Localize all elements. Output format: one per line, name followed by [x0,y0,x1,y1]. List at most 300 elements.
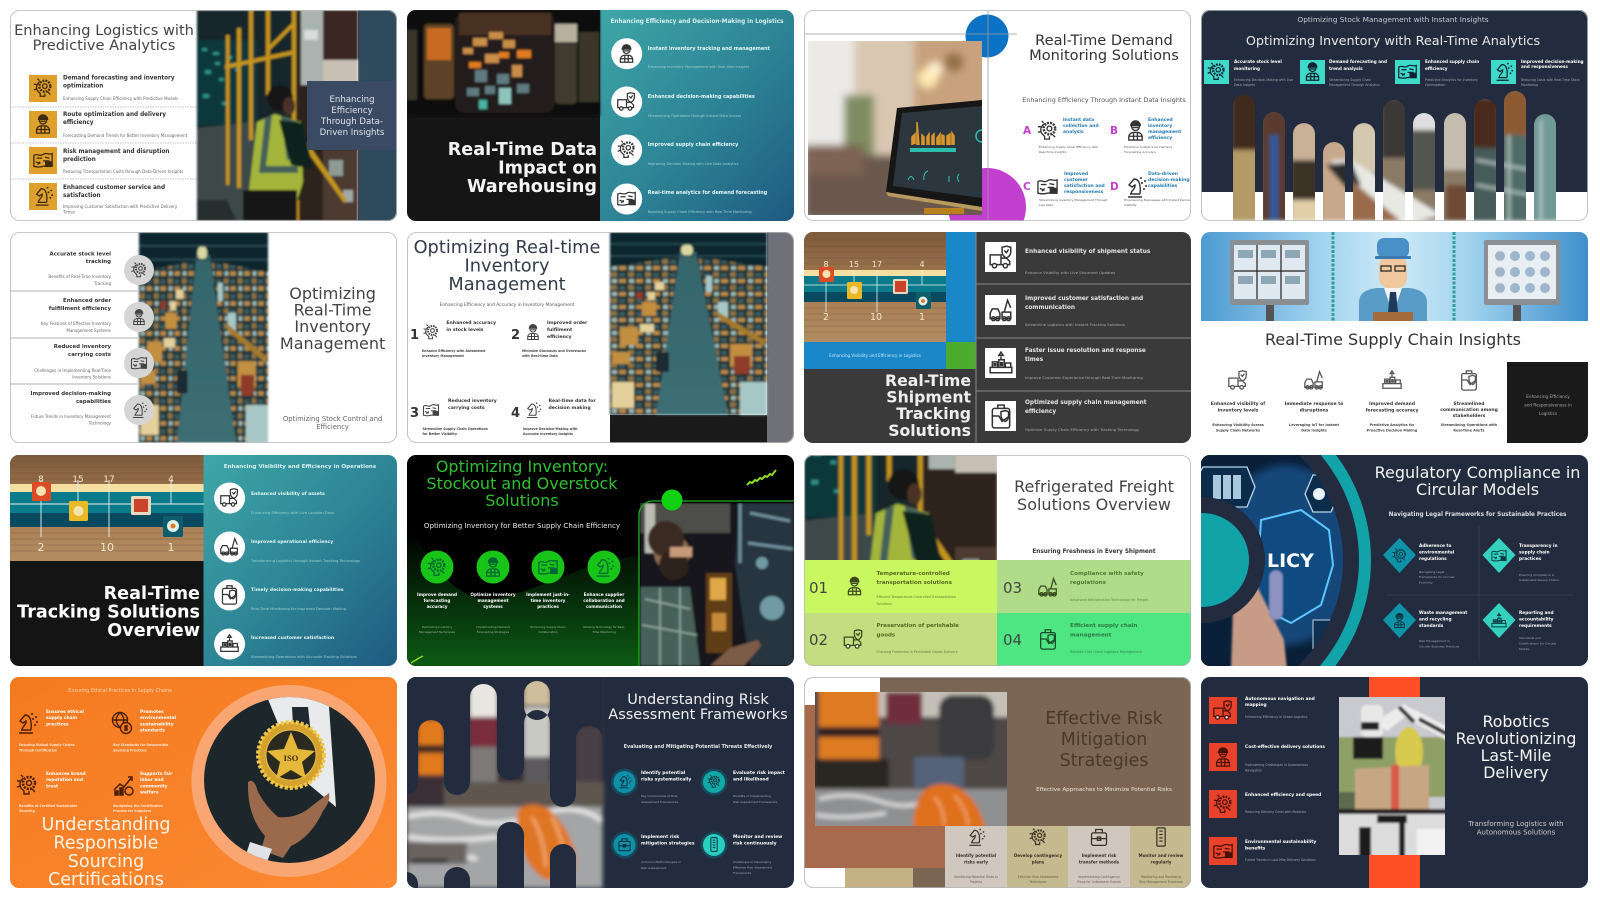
item: shipment status [985,242,1151,275]
icon: shield bag [214,580,245,610]
quadrant 02 [804,613,997,666]
item title: Instant inventory tracking and management [648,46,771,52]
dark ring [1033,397,1359,723]
letter C: C [1023,181,1031,193]
item: order fulfillment [41,298,154,333]
item text: Streamlining Supply Chain [1329,78,1371,82]
title: Impact on [498,158,597,178]
icon: globe with coin [112,712,132,734]
item text: Advanced Refrigeration Technology for Freight [1070,598,1149,602]
item: demand forecasting [29,75,178,102]
subtitle: Optimizing Stock Management with Instant Insights [1297,15,1489,24]
item text: Implementing Demand [476,625,510,629]
icon: worker [476,550,510,584]
item 3 [410,398,497,436]
quadrant 04 [997,613,1191,666]
item text: Monitoring [1521,83,1538,87]
item text: Benefits of Certified Sustainable [19,804,77,808]
item text: Enhancing Inventory Management with Real-time Insights [648,65,749,69]
title: Solutions [485,491,559,510]
item 2 [511,320,588,358]
panel: real-time tracking solutions overview [10,455,398,666]
item title: management [1070,632,1112,638]
item text: Optimization [1425,83,1445,87]
panel: regulatory compliance in circular models [1021,385,1588,735]
item text: Benefits of Real-Time Inventory [48,274,111,279]
item title: Improved customer satisfaction and [1025,296,1143,302]
subtitle: Transforming Logistics with [1468,820,1564,828]
item title: environmental [140,715,177,721]
icon: gear bulb [611,134,642,166]
item text: Data Insights [1234,83,1255,87]
item: transparency [1482,538,1559,582]
item text: Management Systems [66,328,111,333]
item text: Reliable Cold Chain Logistics Management [1070,650,1143,654]
item title: accuracy [427,604,448,609]
item text: Ensuring Ethical Supply Chains [19,743,75,747]
timeline graphic: 1 [919,312,925,323]
title: Regulatory Compliance in [1375,463,1580,482]
item title: Implement risk [641,835,679,840]
item title: regulations [1070,580,1107,586]
item title: Enhanced visibility of [1211,402,1265,407]
icon: tow truck [985,295,1016,325]
item: timely decisions [214,580,346,611]
title: Overview [107,621,200,641]
item text: Collaboration [538,630,558,634]
item title: mitigation strategies [641,840,695,846]
icon: phone [700,832,728,858]
title: Inventory [465,255,549,276]
icon: worker [528,324,538,340]
item title: efficiency [547,334,572,340]
item text: Enhancing Supply Chain [530,625,566,629]
subtitle: Ensuring Freshness in Every Shipment [1032,549,1156,555]
item title: Timely decision-making capabilities [251,587,344,593]
item: decision-making [30,391,154,426]
item text: Streamline Logistics with Instant Tracking Solutions [1025,322,1125,327]
item text: Implementing Contingency [1078,875,1120,879]
item text: Sustainable Supply Chains [1519,578,1559,582]
item title: Enhanced customer service and [63,185,165,191]
photo: policy touchscreen: LICY [1267,550,1314,572]
item text: Proactive Decision Making [1367,428,1418,432]
icon: map [1209,837,1237,865]
accent column [946,232,976,342]
photo: tablet dashboard [804,35,989,220]
item text: Frameworks for Circular [1419,575,1456,579]
item text: Monitoring and Reviewing [1141,875,1181,879]
item title: in stock levels [446,327,484,333]
item title: Monitor and review [1139,853,1183,858]
item text: Risk Assessment Frameworks [733,800,778,804]
item title: Improve demand [417,592,457,597]
item: evaluate risks [700,768,786,804]
timeline graphic: 1 [168,541,174,554]
item title: risks systematically [641,776,691,782]
item title: Reduced inventory [54,344,111,350]
item text: Forecasting Strategies [477,630,510,634]
subtitle: Efficiency [316,423,349,431]
grid lines [804,10,1017,221]
item text: Efficient Temperature-Controlled Transportation [876,595,956,599]
item title: Enhanced accuracy [446,321,496,326]
photo: data barrels [407,10,600,116]
item text: Accurate Inventory Insights [523,432,573,436]
item: environmental regulations [1383,538,1456,584]
icon: truck [611,86,642,118]
item 1 [410,320,496,358]
item text: Inventory Management [422,354,464,358]
item text: Enhance Efficiency with Automated [422,349,485,353]
letter B: B [1110,125,1118,137]
item: just-in-time [526,550,570,634]
item title: communication [1025,305,1075,311]
decorative circle: blue [966,14,1008,58]
photo: hand with ISO seal: ISO [284,753,299,763]
item title: collection and [1063,123,1099,129]
item: asset visibility [214,482,334,515]
icon: map [1395,60,1420,84]
item text: Benefits of Implementing [733,794,771,798]
icon: gear bulb [1204,60,1229,84]
quadrant 03 [997,560,1191,613]
item text: Ensuring Compliance in [1519,573,1554,577]
item text: Streamlining Operations with Accurate Tracking Solutions [251,655,357,659]
item text: Technology [88,420,112,426]
item text: Frameworks [733,871,752,875]
item: customer satisfaction [214,628,357,660]
item text: Future Trends in Inventory Management [31,414,111,419]
icon: gear bulb [1038,121,1055,139]
item text: Navigating Legal [1419,570,1444,574]
item: issue resolution [985,348,1146,380]
item text: Identifying Potential Risks in [954,875,998,879]
item text: Plans for Unforeseen Events [1077,880,1121,884]
icon: tow truck [1305,372,1322,389]
item title: Enhance supplier [584,592,624,597]
icon: truck [214,482,245,514]
subtitle band [804,342,976,369]
item title: Increased customer satisfaction [251,635,334,641]
subtitle: Effective Approaches to Minimize Potential Risks [1036,787,1172,793]
item title: efficiency [1148,135,1172,141]
item title: Temperature-controlled [876,571,950,577]
item title: Implement risk [1082,853,1116,858]
item text: Enhance Visibility with Live Shipment Updates [1025,270,1115,275]
item title: inventory levels [1218,408,1259,414]
title: Real-Time Data [448,140,597,160]
item title: times [1025,357,1044,363]
peach ring [192,685,386,877]
item text: Streamlining Operations with [1441,423,1497,427]
photo: policy touchscreen [1191,445,1361,685]
item text: Models [1519,647,1530,651]
title: Strategies [1060,751,1148,771]
item title: decision making [548,405,591,411]
item title: welfare [140,790,159,796]
title: Predictive Analytics [33,37,175,54]
subtitle: Optimizing Stock Control and [283,415,382,423]
title: Real-Time [294,301,372,320]
title: Tracking Solutions [17,603,200,623]
number: 2 [511,328,520,343]
item title: Improved decision-making [30,391,111,397]
item title: Accurate stock level [50,252,111,258]
icon: gear bulb [124,255,154,285]
item title: Environmental sustainability [1245,840,1316,845]
item text: Sourcing Practices [113,748,147,752]
item: decision-making [611,86,755,118]
item title: Improved decision-making [1521,59,1584,64]
title: Assessment Frameworks [608,707,788,723]
timeline graphic: 17 [872,260,882,269]
item text: Enhancing Decision-Making with Live [1234,78,1293,82]
subtitle: Enhancing Efficiency and Accuracy in Inventory Management [440,302,575,308]
item title: sustainability [140,721,174,727]
item: fair labor [113,771,173,813]
item: ethical supply chain [19,709,84,752]
item text: Challenges in Implementing Real-Time [34,368,111,373]
squiggle accent [411,656,423,663]
item text: Effective Risk Assessment [1018,875,1058,879]
icon: map [1038,180,1057,194]
number: 02 [809,631,828,649]
icon: worker [124,302,154,332]
item title: labor and [140,777,164,783]
item title: capabilities [1148,183,1178,189]
letter D: D [1110,181,1119,193]
title: Management [448,274,566,295]
accent column [1369,677,1420,888]
item A [1023,117,1099,154]
item title: Enhanced visibility of shipment status [1025,249,1151,255]
photo: delivery robot [1334,692,1450,860]
photo: slotted risk image [394,657,604,900]
item D [1110,171,1193,207]
timeline graphic [804,232,946,342]
panel: real-time demand monitoring solutions [804,10,1193,246]
item text: Streamlining Inventory Management Through [1039,198,1107,202]
grid dividers [1387,525,1573,660]
item title: monitoring [1234,66,1260,71]
item title: Immediate response to [1285,402,1343,407]
item: mitigation strategies [611,832,695,870]
title: Sourcing [68,852,144,872]
timeline graphic: 4 [919,260,925,269]
item title: Enhances brand [46,772,86,777]
item: identify risks [611,768,691,804]
item title: Enhanced visibility of assets [251,491,325,497]
item title: Preservation of perishable [876,623,959,629]
item: accurate stock tracking [48,252,154,286]
item title: Demand forecasting and [1329,59,1387,64]
item text: Times [62,210,75,214]
icon: truck [985,242,1016,272]
item: sustainability [1209,837,1316,865]
icon: chess knight [29,183,57,210]
item text: Predictive Analytics for [1370,423,1414,427]
item title: forecasting [424,598,450,603]
teal ring [1021,385,1371,735]
item title: standards [1419,623,1444,629]
item text: Forecasting Demand Trends for Better Inventory Management [63,133,188,138]
item text: Real-Time Monitoring for Improved Decision Making [251,607,346,611]
item text: Enhancing Supply Chain Efficiency with Predictive Models [63,96,178,101]
item text: Assessment Frameworks [641,800,679,804]
timeline graphic: 17 [103,475,115,485]
item title: Identify potential [641,771,685,776]
callout box: and Responsiveness in [1524,403,1572,408]
item text: with Real-time Data [522,354,558,358]
subtitle: Evaluating and Mitigating Potential Threats Effectively [624,744,773,750]
icon: briefcase [1092,830,1106,845]
item: carrying costs [34,344,154,380]
icon: chess knight [1491,60,1516,84]
item title: Risk management and disruption [63,149,169,155]
item title: Streamlined [1454,402,1484,407]
callout: Through Data- [320,117,383,127]
item title: Improved order [547,321,587,326]
icon: gear bulb [424,324,437,339]
item 4 [511,398,596,436]
title: Effective Risk [1045,709,1163,729]
title: Real-Time [885,371,971,390]
item title: goods [876,632,896,638]
icon: worker [1209,743,1237,771]
item title: optimization [63,84,103,90]
item: brand reputation [17,771,86,813]
icon: chess knight [19,713,38,733]
photo: slatted tablet image [1221,85,1571,221]
item: supplier collaboration [583,550,625,634]
item: stock monitoring [1204,59,1293,87]
photo: warehouse aisle [139,232,268,443]
item title: fulfilment [547,327,573,333]
item: customer satisfaction [985,295,1143,327]
title: Optimizing Real-time [414,237,600,258]
item title: Adherence to [1419,544,1451,549]
icon: truck [1209,697,1237,724]
item text: Live Data [1039,203,1053,207]
item text: Solutions [876,602,892,606]
item title: trust [46,783,58,789]
item text: Overcoming Challenges in Autonomous [1245,763,1308,767]
timeline graphic: 2 [823,312,829,323]
item: demand forecasting [1300,59,1387,87]
photo: warehouse aisle [610,232,767,415]
photo frame [639,501,794,666]
item text: Data Insights [1301,428,1327,432]
photo: warehouse worker [804,379,997,632]
item text: Supply Chain Networks [1216,428,1260,432]
title: Refrigerated Freight [1014,477,1174,496]
squiggle accent [747,470,776,485]
icon: gear in diamond [1383,538,1416,573]
item title: satisfaction [63,193,101,199]
item: route optimization [29,111,188,138]
item title: risks early [964,860,988,864]
callout: Driven Insights [320,128,385,138]
callout [307,81,397,150]
item text: Process for Suppliers [113,809,151,813]
item title: Improved supply chain efficiency [648,142,739,148]
item title: practices [46,721,69,727]
quadrant 01 [804,560,997,613]
item title: communication [586,604,622,609]
list divider lines [10,107,197,179]
item: real-time analytics [611,184,768,214]
item title: time inventory [531,598,566,603]
item title: inventory [1148,123,1172,129]
icon: worker [29,111,57,138]
title: Monitoring Solutions [1029,47,1179,64]
item text: Improving Customer Satisfaction with Predictive Delivery [63,204,177,209]
icon: tow truck [214,532,245,562]
icon: briefcase [611,832,638,858]
timeline graphic: 8 [38,475,44,485]
title: Management [280,334,385,353]
icon: map [29,147,57,174]
item text: Utilizing Technology for Real- [583,625,625,629]
number: 1 [410,328,419,343]
panel: optimizing inventory stockout and overstock [407,455,794,666]
item title: Enhanced efficiency and speed [1245,792,1321,798]
item text: Navigating the Certification [113,804,163,808]
timeline graphic: 15 [72,475,84,485]
item: environmental standards [112,709,177,752]
item title: supply chain [1519,550,1550,556]
item: instant inventory tracking [611,38,771,69]
item title: Enhanced order [63,298,111,304]
panel: real-time supply chain insights [1201,232,1588,443]
item: inventory visibility [1211,371,1265,432]
icon: worker [611,38,642,69]
item title: mapping [1245,702,1267,708]
item title: community [140,783,168,789]
item title: and likelihood [733,776,769,782]
item title: requirements [1519,623,1552,629]
item title: capabilities [76,399,111,405]
callout box: Logistics [1539,411,1557,416]
item text: Leveraging IoT for Instant [1289,423,1339,427]
callout: Efficiency [331,106,373,116]
title: Circular Models [1416,480,1539,499]
item: decision-making [1491,59,1584,87]
callout: Enhancing [329,95,375,105]
item text: Certifications for Circular [1519,641,1557,645]
item text: Enhancing Visibility Across [1212,423,1264,427]
item title: Identify potential [956,853,996,858]
item text: Boosting Supply Chain Efficiency with Real-Time Monitoring [648,210,752,214]
item title: Implement just-in- [526,592,570,597]
item text: Risk Management in [1419,639,1450,643]
panel: refrigerated freight solutions overview [804,379,1191,666]
icon: boxes [1383,371,1401,388]
item text: Real-Time Insights [1039,150,1067,154]
item text: Standards and [1519,636,1541,640]
icon: gear bulb [700,768,728,796]
item: demand forecasting [417,550,457,634]
item text: Time Monitoring [591,630,616,634]
title: Understanding [42,815,170,835]
item title: risk continuously [733,840,777,846]
title: Shipment [886,388,971,407]
panel: understanding responsible sourcing certifications [10,677,397,890]
item title: practices [537,604,559,609]
title: Optimizing Inventory with Real-Time Analytics [1246,34,1540,49]
column: contingency plans [1007,826,1068,888]
